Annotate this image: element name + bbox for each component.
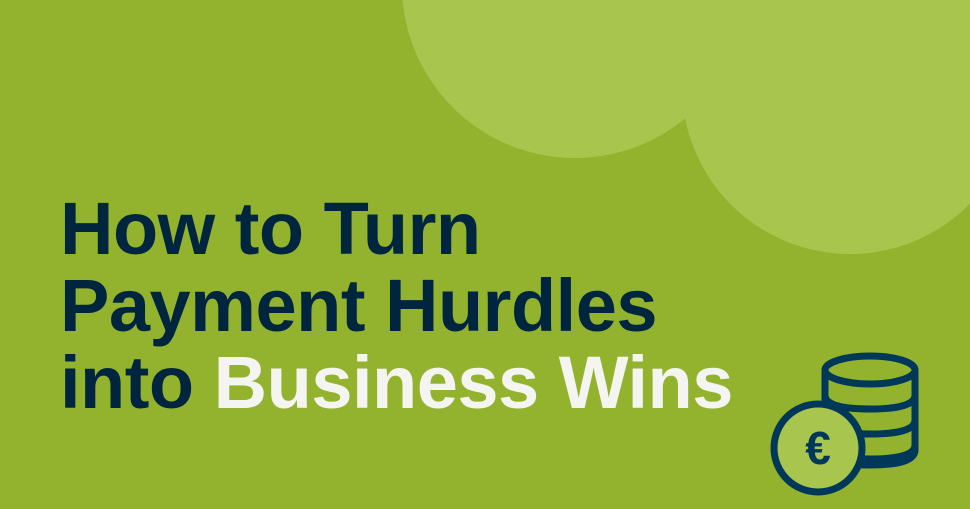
title: into Business Wins xyxy=(60,341,733,424)
title: How to Turn xyxy=(60,187,481,270)
icon: euro coin stack xyxy=(770,352,918,496)
title xyxy=(60,187,733,424)
title: Payment Hurdles xyxy=(60,264,657,347)
icon: euro coin stack: € xyxy=(805,422,831,474)
